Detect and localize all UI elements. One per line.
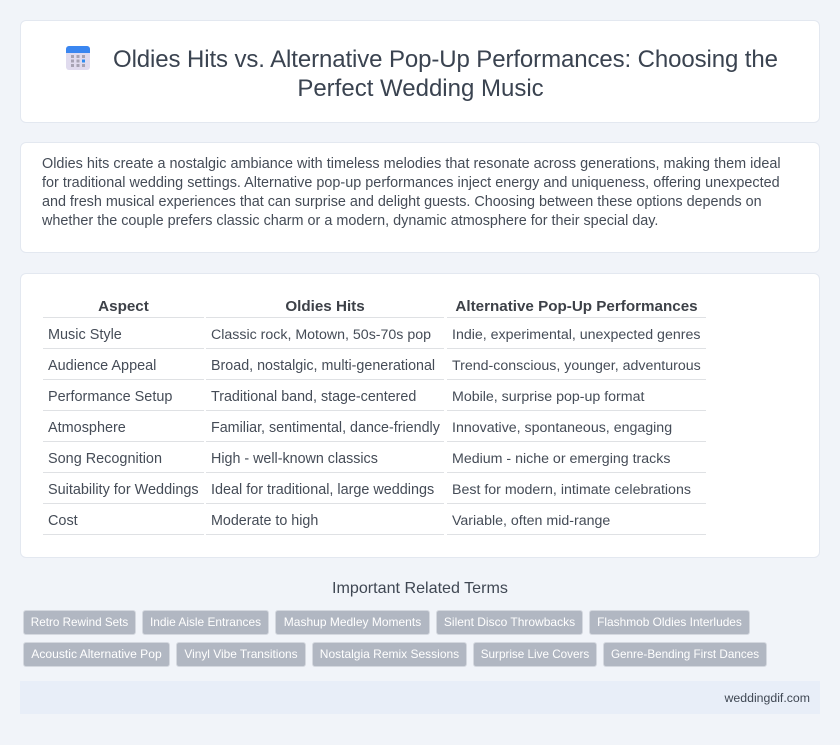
intro text: whether the couple prefers classic charm or a modern, dynamic atmosphere for their special day.: [42, 213, 658, 229]
comparison table: Audience Appeal: [48, 358, 156, 374]
comparison table: Medium - niche or emerging tracks: [452, 451, 670, 467]
related terms tags: Silent Disco Throwbacks: [444, 615, 575, 629]
related terms tags: Indie Aisle Entrances: [150, 615, 261, 629]
comparison table: Oldies Hits: [285, 298, 365, 315]
intro panel: [20, 142, 820, 253]
comparison table: Innovative, spontaneous, engaging: [452, 420, 672, 436]
header card: [20, 20, 820, 123]
related terms tags: Retro Rewind Sets: [31, 616, 128, 629]
related terms tags: Surprise Live Covers: [481, 648, 589, 661]
comparison table: [43, 298, 706, 535]
title: [113, 46, 778, 102]
related terms tags: Vinyl Vibe Transitions: [184, 647, 298, 661]
title: Oldies Hits vs. Alternative Pop-Up Performances: Choosing the: [113, 46, 778, 73]
comparison table: Familiar, sentimental, dance-friendly: [211, 420, 440, 436]
related terms tags: Nostalgia Remix Sessions: [320, 647, 459, 661]
comparison table: Best for modern, intimate celebrations: [452, 482, 691, 498]
intro text: and fresh musical experiences that can surprise and delight guests. Choosing between these options depends on: [42, 194, 762, 210]
comparison table: Trend-conscious, younger, adventurous: [452, 358, 701, 374]
intro text: [42, 156, 781, 229]
comparison table: Atmosphere: [48, 420, 126, 436]
comparison table: Alternative Pop-Up Performances: [455, 298, 698, 315]
comparison table: Traditional band, stage-centered: [211, 389, 416, 405]
related terms tags: Flashmob Oldies Interludes: [597, 615, 742, 629]
comparison table: Ideal for traditional, large weddings: [211, 482, 434, 498]
comparison table: Indie, experimental, unexpected genres: [452, 327, 700, 343]
intro text: Oldies hits create a nostalgic ambiance with timeless melodies that resonate across generations, making them ideal: [42, 156, 781, 172]
comparison table: Variable, often mid-range: [452, 513, 610, 529]
comparison table: Classic rock, Motown, 50s-70s pop: [211, 327, 431, 343]
related terms tags: Mashup Medley Moments: [284, 615, 421, 629]
icon: calendar: [66, 46, 90, 70]
comparison table: Moderate to high: [211, 513, 318, 529]
related terms heading: Important Related Terms: [332, 579, 508, 597]
table panel: [20, 273, 820, 558]
comparison table: Suitability for Weddings: [48, 482, 199, 498]
footer bar: [20, 681, 820, 714]
related terms tags: Genre-Bending First Dances: [611, 648, 759, 661]
comparison table: Song Recognition: [48, 451, 162, 467]
related terms tags: Acoustic Alternative Pop: [31, 647, 162, 661]
comparison table: Aspect: [98, 298, 149, 315]
title: Perfect Wedding Music: [297, 75, 544, 102]
comparison table: Performance Setup: [48, 389, 172, 405]
comparison table: Broad, nostalgic, multi-generational: [211, 358, 435, 374]
comparison table: Mobile, surprise pop-up format: [452, 389, 644, 405]
footer source: weddingdif.com: [725, 691, 810, 705]
related terms tags: [23, 610, 767, 667]
comparison table: Cost: [48, 513, 78, 529]
comparison table: Music Style: [48, 327, 122, 343]
intro text: for traditional wedding settings. Alternative pop-up performances inject energy and uniqueness, offering unexpected: [42, 175, 780, 191]
comparison table: High - well-known classics: [211, 451, 378, 467]
